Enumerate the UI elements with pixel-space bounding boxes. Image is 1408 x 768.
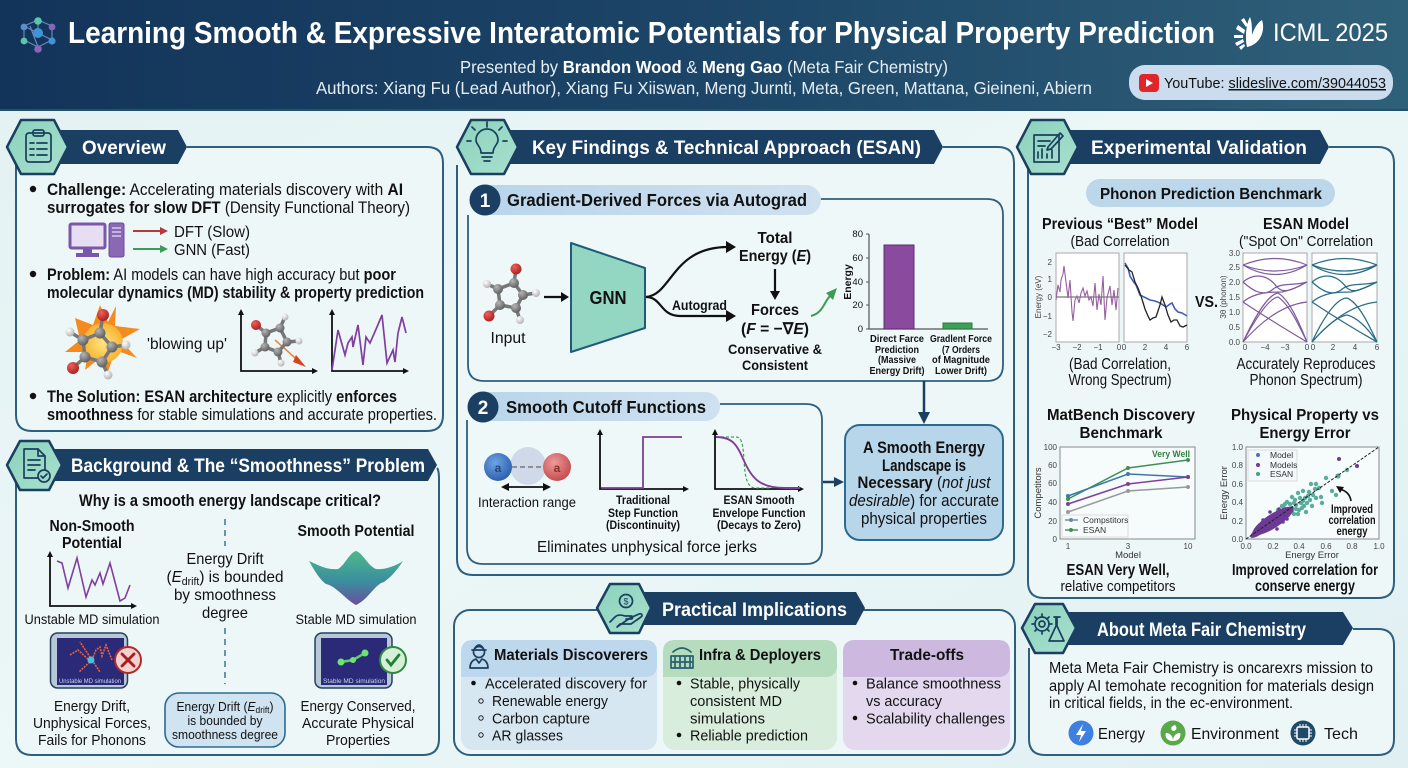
chart: ESAN spectra: 2.5 <box>1229 263 1241 272</box>
smooth potential heading: Smooth Potential <box>298 523 414 540</box>
scatter chart: physical property vs energy error: 0.4 <box>1293 542 1305 551</box>
icon: smooth landscape <box>309 551 403 605</box>
line chart: matbench: 60 <box>1048 461 1058 470</box>
bar chart: energy drift <box>842 229 992 377</box>
previous model caption: Wrong Spectrum) <box>1068 372 1172 389</box>
GNN block: GNN <box>590 288 626 308</box>
energy drift statement: by smoothness <box>174 587 276 604</box>
bar label: gradient force <box>930 333 992 377</box>
card: infra and deployers <box>663 640 837 750</box>
chart: ESAN spectra: 3.0 <box>1229 249 1241 258</box>
chart: ESAN spectra: 6 <box>1375 343 1380 352</box>
energy tag: Energy <box>1098 726 1145 743</box>
icon: input molecule <box>483 264 540 324</box>
energy drift callout: drift <box>256 705 270 715</box>
step function label: Step Function <box>608 508 678 520</box>
unstable label: Unstable MD simulation <box>24 612 160 627</box>
energy drift callout <box>165 693 285 747</box>
line chart: matbench: 0 <box>1053 535 1058 544</box>
about text: Meta Meta Fair Chemistry is oncarexrs mission to <box>1049 660 1373 677</box>
step 1 heading: 1 <box>480 191 491 212</box>
arrow: cutoff to callout <box>823 477 844 487</box>
card: materials discoverers: Accelerated discovery for <box>485 676 647 692</box>
smooth envelope label: (Decays to Zero) <box>717 520 801 532</box>
icon: computer with DFT and GNN arrows: DFT (Slow) <box>174 224 250 241</box>
about heading <box>1022 604 1353 653</box>
icon: scientist <box>470 645 488 668</box>
chart: non-smooth potential <box>47 551 137 609</box>
chart legend: ESAN <box>1083 525 1106 535</box>
practical heading <box>597 584 865 633</box>
ESAN model heading <box>1239 216 1373 250</box>
arrow: findings to callout <box>918 381 930 424</box>
energy drift statement: Energy Drift <box>186 551 264 568</box>
bar label: direct force: Direct Farce <box>870 333 924 345</box>
annotation: improved correlation <box>1328 486 1376 538</box>
step 2 heading <box>468 392 720 422</box>
chart: ESAN spectra: 0 <box>1305 343 1310 352</box>
card: materials discoverers <box>461 640 657 750</box>
chart: ESAN spectra: 1.0 <box>1229 308 1241 317</box>
icon: computer with DFT and GNN arrows <box>70 223 250 259</box>
callout: smooth landscape necessary: A Smooth Energy <box>863 439 986 457</box>
card: infra and deployers: Reliable prediction <box>690 728 808 744</box>
non-smooth heading: Non-Smooth <box>50 518 134 535</box>
conservative label: Consistent <box>742 357 808 373</box>
scatter chart: physical property vs energy error <box>1219 443 1385 561</box>
chart: previous model spectra: −2 <box>1072 343 1082 352</box>
callout: smooth landscape necessary: Necessary (not just <box>858 474 992 492</box>
card: trade-offs: Scalability challenges <box>866 710 1005 728</box>
eliminates label: Eliminates unphysical force jerks <box>537 539 757 556</box>
chart legend: Compstitors <box>1083 515 1128 525</box>
conservative label: Conservative & <box>728 341 822 357</box>
chart legend <box>1062 515 1128 537</box>
scatter chart: physical property vs energy error: 0.8 <box>1346 542 1358 551</box>
energy drift statement: drift <box>182 576 199 588</box>
bar label: direct force <box>870 333 924 377</box>
physical property heading: Physical Property vs <box>1231 407 1379 424</box>
background heading: Background & The “Smoothness” Problem <box>71 455 425 477</box>
smooth envelope label: ESAN Smooth <box>724 495 794 507</box>
line chart: matbench: 1 <box>1066 542 1071 551</box>
physical property heading: Energy Error <box>1260 425 1350 442</box>
ESAN model caption <box>1236 356 1376 389</box>
chart: ESAN spectra: 0.5 <box>1229 323 1241 332</box>
icon: ICML logo <box>1234 17 1263 50</box>
authors: Authors: Xiang Fu (Lead Author), Xiang Fu Xiiswan, Meng Jurnti, Meta, Green, Mattana, Gieineni, Abiern <box>316 78 1092 98</box>
phonon benchmark pill: Phonon Prediction Benchmark <box>1100 186 1322 203</box>
card: trade-offs <box>843 640 1010 750</box>
chart: previous model spectra: 2 <box>1048 258 1053 267</box>
chart: previous model spectra: 1 <box>1048 275 1053 284</box>
about text: apply AI temohate recognition for materials design <box>1049 678 1374 695</box>
previous model heading: (Bad Correlation <box>1070 233 1170 250</box>
scatter chart: physical property vs energy error: Energy Error <box>1285 550 1339 561</box>
forces label <box>741 302 809 338</box>
energy drift statement <box>166 551 284 622</box>
card: infra and deployers: consistent MD <box>690 693 782 710</box>
card: materials discoverers: Renewable energy <box>492 693 608 710</box>
chart: previous model spectra: 0 <box>1122 343 1127 352</box>
overview heading: Overview <box>82 137 167 159</box>
icon: report with pen <box>1034 133 1063 162</box>
panel: gradient-derived forces <box>468 184 1003 381</box>
bar chart: energy drift: Energy <box>842 264 854 300</box>
matbench heading: Benchmark <box>1080 425 1163 442</box>
arrow: green to chart <box>811 288 837 316</box>
icon: interacting atoms: a <box>554 461 561 475</box>
chart: ESAN spectra: 2 <box>1331 343 1336 352</box>
scatter chart: physical property vs energy error: 0.2 <box>1232 517 1244 526</box>
line chart: matbench: 3 <box>1126 542 1131 551</box>
line chart: matbench: Very Well <box>1152 449 1190 460</box>
non-smooth heading <box>50 518 134 552</box>
chart: ESAN spectra: 3θ (phonon) <box>1219 275 1228 319</box>
chart: ESAN spectra: 0 <box>1243 343 1248 352</box>
chart: ESAN spectra: 0 <box>1311 343 1316 352</box>
previous model caption: (Bad Correlation, <box>1069 356 1171 373</box>
scatter chart: physical property vs energy error: 0.8 <box>1232 461 1244 470</box>
scatter chart: physical property vs energy error: 0.6 <box>1320 542 1332 551</box>
callout: smooth landscape necessary: physical properties <box>861 510 987 528</box>
energy drift statement: degree <box>202 605 248 622</box>
title: Learning Smooth & Expressive Interatomic Potentials for Physical Property Prediction <box>68 15 1215 50</box>
total energy label: Energy (E) <box>739 248 811 265</box>
bar chart: energy drift: 60 <box>852 253 863 264</box>
about text <box>1049 660 1374 712</box>
panel: background and smoothness problem <box>7 441 439 755</box>
environment tag <box>1160 720 1280 746</box>
energy drift callout: Energy Drift (E <box>176 699 256 714</box>
card: infra and deployers: Infra & Deployers <box>699 647 821 664</box>
line chart: matbench: Competitors <box>1033 467 1044 519</box>
non-smooth consequences <box>33 698 151 749</box>
total energy label <box>739 230 811 265</box>
card: infra and deployers: Stable, physically <box>690 676 800 692</box>
card: infra and deployers: simulations <box>690 710 765 728</box>
line chart: matbench: 100 <box>1044 443 1058 452</box>
panel: experimental validation <box>1017 120 1394 598</box>
forces label: Forces <box>751 302 799 319</box>
energy tag <box>1068 720 1145 746</box>
bar chart: energy drift: 20 <box>852 300 863 311</box>
chart: ESAN spectra <box>1219 249 1380 352</box>
presenters: Presented by Brandon Wood & Meng Gao (Meta Fair Chemistry) <box>460 57 948 77</box>
scatter chart: physical property vs energy error: Energy Error <box>1219 466 1230 520</box>
icon: hand with coin <box>610 594 642 627</box>
card: materials discoverers: Carbon capture <box>492 710 590 728</box>
scatter legend: Model <box>1270 450 1293 460</box>
icon: gears and flask <box>1032 614 1064 641</box>
scatter chart: physical property vs energy error: 0.0 <box>1240 542 1252 551</box>
chart: smooth envelope <box>712 429 804 492</box>
about text: in critical fields, in the ec-environment. <box>1049 695 1293 712</box>
environment tag: Environment <box>1191 726 1280 743</box>
solution text: The Solution: ESAN architecture explicitly enforces <box>47 388 397 406</box>
chart: ESAN spectra: 4 <box>1353 343 1358 352</box>
validation heading <box>1017 120 1329 174</box>
challenge text: Challenge: Accelerating materials discovery with AI <box>47 181 403 199</box>
annotation: improved correlation: correlation <box>1328 515 1376 527</box>
icon: stable simulation tablet <box>315 633 406 688</box>
energy drift callout: smoothness degree <box>172 727 278 742</box>
icon: data center <box>671 648 693 668</box>
callout: smooth landscape necessary <box>845 425 1003 540</box>
icon: light bulb <box>467 122 507 161</box>
icon: exploding molecule <box>65 305 140 380</box>
arrow: input to GNN <box>544 292 569 302</box>
scatter chart: physical property vs energy error: 1.0 <box>1232 443 1244 452</box>
bar chart: energy drift: 40 <box>852 277 863 288</box>
ESAN model caption: Phonon Spectrum) <box>1250 372 1362 389</box>
tech tag <box>1290 720 1358 746</box>
energy drift callout: ) <box>269 699 274 714</box>
ESAN model heading: ESAN Model <box>1263 216 1349 233</box>
smooth consequences: Energy Conserved, <box>300 698 416 715</box>
solution text <box>30 388 437 424</box>
chart: previous model spectra: 6 <box>1185 343 1190 352</box>
icon: stable simulation tablet: Stable MD simulation <box>323 679 385 685</box>
scatter legend: Models <box>1270 460 1297 470</box>
conference label: ICML 2025 <box>1273 19 1388 47</box>
chart: previous model spectra: −1 <box>1093 343 1103 352</box>
practical heading: Practical Implications <box>662 599 847 621</box>
non-smooth heading: Potential <box>62 535 122 552</box>
background heading <box>7 441 437 490</box>
bar label: direct force: (Massive <box>878 354 916 366</box>
arrows: GNN outputs <box>646 241 736 322</box>
previous model heading: Previous “Best” Model <box>1042 216 1198 233</box>
panel: smooth cutoff functions <box>467 392 822 564</box>
bar chart: energy drift: 80 <box>852 229 863 240</box>
annotation: improved correlation: energy <box>1336 526 1368 538</box>
challenge text <box>30 181 410 217</box>
matbench heading: MatBench Discovery <box>1047 407 1195 424</box>
card: trade-offs: vs accuracy <box>866 693 942 710</box>
step 1 heading <box>470 184 821 216</box>
non-smooth consequences: Energy Drift, <box>54 698 130 715</box>
card: materials discoverers: Materials Discoverers <box>494 647 648 664</box>
YouTube link pill: YouTube: slideslive.com/39044053 <box>1164 75 1386 92</box>
smooth consequences: Properties <box>326 732 390 749</box>
solution text: smoothness for stable simulations and accurate properties. <box>47 406 437 424</box>
vs label: VS. <box>1195 294 1218 311</box>
matbench heading <box>1047 407 1195 442</box>
chart: noisy trajectory <box>329 309 409 374</box>
phonon benchmark pill <box>1086 179 1335 207</box>
step function label <box>606 495 680 532</box>
problem text <box>30 266 424 302</box>
total energy label: Total <box>758 230 792 247</box>
tech tag: Tech <box>1324 726 1358 743</box>
chart: previous model spectra: 0 <box>1048 293 1053 302</box>
header banner <box>0 0 1408 111</box>
ESAN model caption: Accurately Reproduces <box>1236 356 1376 373</box>
ESAN model heading: ("Spot On" Correlation <box>1239 233 1373 250</box>
challenge text: surrogates for slow DFT (Density Functional Theory) <box>47 199 410 217</box>
icon: interacting atoms <box>484 447 571 491</box>
step 2 heading: 2 <box>478 398 488 419</box>
chart: ESAN spectra: 1.5 <box>1229 293 1241 302</box>
bar label: gradient force: of Magnitude <box>932 354 990 366</box>
scatter chart: physical property vs energy error: 0.4 <box>1232 498 1244 507</box>
input label: Input <box>490 330 526 347</box>
key findings heading <box>457 120 943 174</box>
chart: previous model spectra: 2 <box>1143 343 1148 352</box>
icon: clipboard <box>26 130 51 162</box>
overview heading <box>7 120 187 174</box>
GNN block <box>571 243 645 352</box>
step function label: Traditional <box>616 495 670 507</box>
property caption <box>1232 562 1378 595</box>
card: materials discoverers: AR glasses <box>492 728 563 744</box>
chart: ESAN spectra: −3 <box>1280 343 1290 352</box>
bar label: gradient force: Lower Drift) <box>935 365 987 377</box>
stable label: Stable MD simulation <box>296 612 416 627</box>
scatter chart: physical property vs energy error: 0.6 <box>1232 480 1244 489</box>
smooth consequences <box>300 698 416 749</box>
chart: previous model spectra: −1 <box>1043 312 1053 321</box>
previous model heading <box>1042 216 1198 250</box>
step function label: (Discontinuity) <box>606 520 680 532</box>
callout: smooth landscape necessary: Landscape is <box>882 457 966 475</box>
scatter chart: physical property vs energy error: 0.0 <box>1232 535 1244 544</box>
callout: smooth landscape necessary: desirable) for accurate <box>849 492 999 510</box>
non-smooth consequences: Unphysical Forces, <box>33 715 151 732</box>
line chart: matbench <box>1033 443 1195 561</box>
energy drift callout: is bounded by <box>188 713 263 728</box>
smooth consequences: Accurate Physical <box>302 715 414 732</box>
line chart: matbench: 10 <box>1184 542 1193 551</box>
card: trade-offs: Balance smoothness <box>866 676 1001 692</box>
icon: unstable simulation tablet: Unstable MD simulation <box>59 679 121 685</box>
question: Why is a smooth energy landscape critical? <box>79 492 381 510</box>
previous model caption <box>1068 356 1172 389</box>
scatter chart: physical property vs energy error: 1.0 <box>1373 542 1385 551</box>
bar chart: energy drift: 0 <box>858 324 863 335</box>
bar label: gradient force: (7 Orders <box>942 344 980 356</box>
chart: previous model spectra <box>1034 253 1190 352</box>
smooth envelope label <box>712 495 806 532</box>
property caption: Improved correlation for <box>1232 562 1378 579</box>
panel: overview <box>7 120 443 431</box>
key findings heading: Key Findings & Technical Approach (ESAN) <box>532 137 921 159</box>
chart: previous model spectra: 4 <box>1164 343 1169 352</box>
chart: ESAN spectra: −4 <box>1260 343 1270 352</box>
scatter legend <box>1248 450 1297 481</box>
bar label: direct force: Energy Drift) <box>870 365 924 377</box>
energy drift statement: ) is bounded <box>199 569 284 586</box>
line chart: matbench: 20 <box>1048 517 1058 526</box>
panel: key findings <box>457 120 1014 575</box>
step 1 heading: Gradient-Derived Forces via Autograd <box>507 190 807 210</box>
validation heading: Experimental Validation <box>1091 137 1307 159</box>
scatter legend: ESAN <box>1270 469 1293 479</box>
practical heading: $ <box>623 596 629 606</box>
line chart: matbench: 40 <box>1048 498 1058 507</box>
physical property heading <box>1231 407 1379 442</box>
matbench caption: ESAN Very Well, <box>1066 562 1170 579</box>
YouTube link pill <box>1129 65 1393 100</box>
line chart: matbench: 60 <box>1048 479 1058 488</box>
conservative label <box>728 341 822 373</box>
icon: computer with DFT and GNN arrows: GNN (Fast) <box>174 242 250 259</box>
icon: molecular network logo <box>21 17 56 53</box>
matbench caption <box>1060 562 1176 595</box>
about heading: About Meta Fair Chemistry <box>1097 619 1306 641</box>
chart: previous model spectra: Energy (eV) <box>1034 275 1043 318</box>
chart: previous model spectra: −2 <box>1043 330 1053 339</box>
arrow: energy to forces <box>770 269 780 300</box>
property caption: conserve energy <box>1255 578 1355 595</box>
icon: interacting atoms: a <box>495 461 502 475</box>
bar label: gradient force: Gradlent Force <box>930 333 992 345</box>
interaction range label: Interaction range <box>478 494 576 510</box>
step 2 heading: Smooth Cutoff Functions <box>506 397 706 417</box>
autograd label: Autograd <box>672 297 727 313</box>
panel: practical implications <box>454 584 1015 755</box>
matbench caption: relative competitors <box>1060 578 1176 595</box>
chart: step function <box>597 429 689 492</box>
panel: about meta fair chemistry <box>1022 604 1394 755</box>
icon: document with check <box>24 449 50 482</box>
forces label: (F = −∇E) <box>741 321 809 338</box>
chart: previous model spectra: 0 <box>1117 343 1122 352</box>
scatter chart: physical property vs energy error: 0.2 <box>1267 542 1279 551</box>
icon: unstable simulation tablet <box>50 633 141 688</box>
card: trade-offs: Trade-offs <box>890 647 964 664</box>
chart: previous model spectra: −3 <box>1051 343 1061 352</box>
problem text: Problem: AI models can have high accuracy but poor <box>47 266 396 284</box>
chart: ESAN spectra: 0.0 <box>1229 338 1241 347</box>
smooth envelope label: Envelope Function <box>712 508 806 520</box>
non-smooth consequences: Fails for Phonons <box>38 732 146 749</box>
line chart: matbench: Model <box>1115 550 1141 561</box>
blowing up label: 'blowing up' <box>147 336 227 353</box>
problem text: molecular dynamics (MD) stability & property prediction <box>47 284 424 302</box>
bar label: direct force: Prediction <box>875 344 919 356</box>
energy drift statement: (E <box>166 569 182 586</box>
annotation: improved correlation: Improved <box>1331 504 1373 516</box>
chart: ESAN spectra: 2.0 <box>1229 278 1241 287</box>
chart: molecule force axes <box>238 309 318 374</box>
